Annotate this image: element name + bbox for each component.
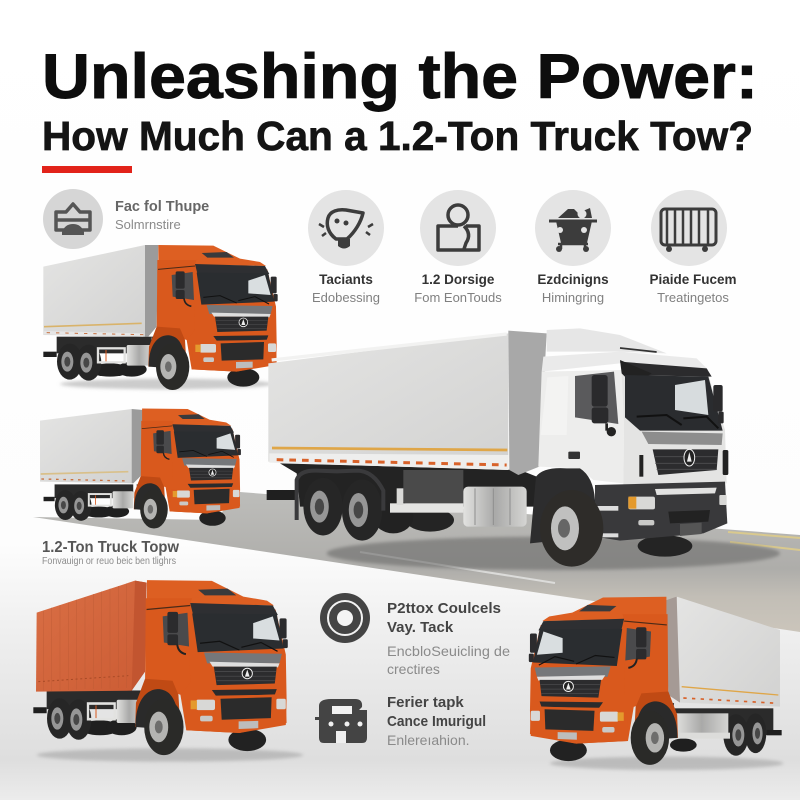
- label: [312, 272, 380, 305]
- icon: person frame: [420, 190, 496, 266]
- feature text: P2ttox Coulcels: [387, 600, 501, 617]
- label: Ezdcinigns: [537, 272, 609, 287]
- feature: Piaide Fucem: [649, 190, 737, 305]
- icon: loaded cart: [535, 190, 611, 266]
- label: Fom EonTouds: [414, 290, 502, 305]
- icon: cargo cage: [651, 190, 727, 266]
- feature: 1.2 Dorsige: [414, 190, 502, 305]
- feature text: Fac fol Thupe: [115, 199, 209, 215]
- feature: Ezdcinigns: [535, 190, 611, 305]
- icon: vehicle badge: [43, 189, 103, 249]
- label: [537, 272, 609, 305]
- feature text: Cance Imurigul: [387, 713, 486, 730]
- road band: [33, 492, 800, 632]
- truck: orange truck, bottom left: [33, 580, 303, 762]
- label: Edobessing: [312, 290, 380, 305]
- label: Piaide Fucem: [649, 272, 737, 287]
- label: Treatingetos: [657, 290, 729, 305]
- label: Taciants: [319, 272, 373, 287]
- feature: Taciants: [308, 190, 384, 305]
- icon: light bulb: [308, 190, 384, 266]
- feature: P2ttox Coulcels: [320, 593, 510, 677]
- truck: orange cab with white box, upper left: [43, 245, 278, 390]
- icon: target disc: [320, 593, 370, 643]
- label: Himingring: [542, 290, 604, 305]
- feature text: Solmrnstire: [115, 217, 181, 232]
- white cab: [530, 328, 728, 567]
- feature text: EncbloSeuicling de: [387, 643, 510, 659]
- caption: 1.2-Ton Truck Topw: 1.2-Ton Truck Topw: [42, 539, 180, 556]
- label: 1.2 Dorsige: [422, 272, 495, 287]
- feature text: [387, 600, 510, 677]
- title line 2: How Much Can a 1.2-Ton Truck Tow?: [42, 113, 753, 159]
- title: [42, 42, 758, 159]
- feature: Ferier tapk: [315, 694, 486, 748]
- feature text: [387, 694, 486, 748]
- feature text: [115, 199, 209, 232]
- icon: bus front: [315, 699, 367, 743]
- feature text: Enlereıahion.: [387, 732, 470, 748]
- truck: orange cab with white box, bottom right, facing left: [529, 597, 783, 770]
- truck: large white truck, centre right: [267, 328, 780, 570]
- feature text: Ferier tapk: [387, 694, 464, 711]
- label: [414, 272, 502, 305]
- truck: orange cab with white box, middle left: [40, 408, 241, 529]
- feature text: Vay. Tack: [387, 619, 454, 636]
- caption: 1.2-Ton Truck Topw: Fonvauign or reuo beic ben tlighrs: [42, 555, 176, 567]
- caption: 1.2-Ton Truck Topw: [42, 539, 180, 567]
- feature: Fac fol Thupe: [43, 189, 209, 249]
- title line 1: Unleashing the Power:: [42, 42, 758, 112]
- feature text: crectires: [387, 661, 440, 677]
- label: [649, 272, 737, 305]
- red accent bar: [42, 166, 132, 173]
